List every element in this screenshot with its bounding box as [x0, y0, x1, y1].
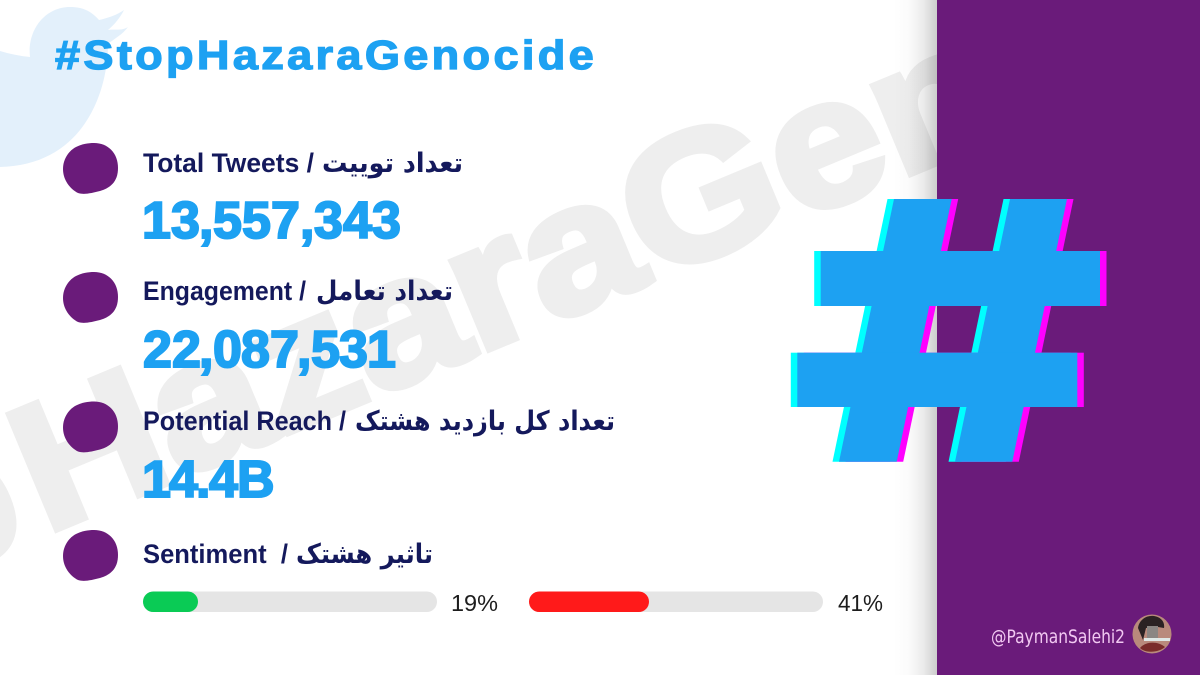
- bar chart: positive sentiment: [143, 590, 498, 616]
- panel: purple sidebar: [937, 0, 1200, 675]
- icon: purple blob bullet: [63, 402, 118, 452]
- value: engagement: 22,087,531: [143, 321, 396, 379]
- bar chart: negative sentiment: [529, 590, 883, 616]
- label: engagement: Engagement /: [143, 276, 307, 306]
- label: sentiment: [143, 539, 433, 570]
- label: total tweets: [143, 148, 463, 179]
- bar chart: negative sentiment: 41%: [838, 590, 883, 616]
- label: total tweets: Total Tweets /: [143, 148, 315, 178]
- icon: twitter bird watermark: [0, 7, 128, 167]
- label: sentiment: Sentiment /: [143, 539, 289, 569]
- label: sentiment: تاثیر هشتک: [296, 539, 433, 570]
- stat: potential reach: [63, 402, 615, 509]
- stat: sentiment: [63, 530, 883, 616]
- icon: large glitch hash symbol: [791, 199, 1106, 462]
- stat: engagement: [63, 272, 453, 379]
- icon: purple blob bullet: [63, 143, 118, 194]
- value: potential reach: 14.4B: [142, 451, 275, 509]
- icon: purple blob bullet: [63, 272, 118, 323]
- author handle: @PaymanSalehi2: [991, 626, 1125, 648]
- title: #StopHazaraGenocide: [55, 32, 597, 78]
- icon: author avatar: [1132, 614, 1172, 654]
- label: potential reach: Potential Reach /: [143, 406, 347, 436]
- label: engagement: تعداد تعامل: [316, 276, 453, 307]
- icon: purple blob bullet: [63, 530, 118, 581]
- panel shadow: [893, 0, 937, 675]
- label: potential reach: [143, 406, 615, 437]
- label: total tweets: تعداد توییت: [322, 148, 463, 179]
- label: potential reach: تعداد کل بازدید هشتک: [355, 406, 615, 437]
- bar chart: positive sentiment: 19%: [451, 590, 498, 616]
- stat: total tweets: [63, 143, 463, 250]
- label: engagement: [143, 276, 453, 307]
- value: total tweets: 13,557,343: [142, 192, 401, 250]
